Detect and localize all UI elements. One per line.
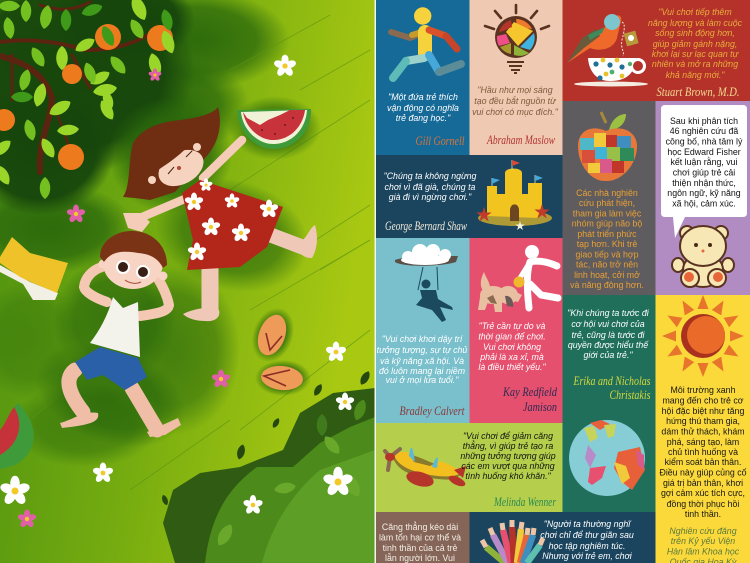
bushes	[161, 369, 375, 563]
quote text	[377, 334, 467, 385]
illustration: children lying on the grass	[0, 0, 425, 563]
girl face	[152, 143, 210, 193]
quote text: giúp giảm gánh nặng,	[653, 39, 737, 49]
body text: phá, sáng tạo, làm	[667, 437, 739, 447]
panel: purple, teddy bear	[656, 101, 750, 295]
source note: Hàn lâm Khoa học	[667, 546, 740, 556]
body text	[570, 188, 644, 290]
quote text: vui ở mọi lứa tuổi."	[386, 375, 459, 385]
panel: blue, runner quote	[376, 0, 470, 155]
source note	[667, 526, 740, 563]
panel: navy, pencils quote	[470, 512, 656, 563]
diagonal grass lines	[30, 15, 370, 490]
author: George Bernard Shaw	[385, 219, 467, 233]
body text: Môi trường xanh	[671, 385, 736, 395]
quote text	[472, 85, 559, 117]
flip-flops	[253, 311, 304, 392]
quote text: khả năng mới."	[666, 70, 725, 80]
source note: trên Kỷ yếu Viện	[671, 536, 735, 546]
quote text: tưởng tượng, sự tự chủ	[377, 345, 467, 355]
panel: lime, airplane quote	[376, 423, 562, 512]
boy head	[103, 237, 163, 289]
dress flowers	[184, 178, 279, 261]
girl hair	[123, 107, 220, 200]
source note: Nghiên cứu đăng	[669, 526, 737, 536]
author: Kay Redfield	[502, 385, 558, 399]
author: Abraham Maslow	[486, 133, 555, 147]
quote text: "Trẻ cần tự do và	[479, 321, 545, 331]
body text: Các nhà nghiên	[576, 188, 638, 198]
icon: child with ball and dog	[478, 245, 558, 312]
author	[573, 374, 651, 402]
quote text: tạo đều bắt nguồn từ	[474, 96, 557, 106]
body text: chơi giúp trẻ cải	[673, 168, 735, 178]
icon: running figure	[391, 7, 461, 78]
body text: gợi cảm xúc tích cực,	[661, 488, 745, 498]
quote text: chơi chỉ để thư giãn sau	[540, 530, 634, 540]
quote text: phải là xa xỉ, mà	[479, 352, 544, 362]
quote text	[387, 92, 459, 123]
body text: Điều này giúp củng cố	[659, 468, 747, 478]
quote text: quyền được hiểu thế	[568, 340, 649, 350]
author	[502, 385, 558, 414]
tree shadow on grass	[0, 0, 425, 563]
quote text: khơi lại sự lạc quan tự	[652, 49, 740, 59]
panel: green, globe quote	[562, 295, 656, 512]
girl arms	[203, 140, 242, 178]
author: Christakis	[610, 388, 651, 402]
quote text: "Hầu như mọi sáng	[477, 85, 553, 95]
body text: kiểm soát bản thân.	[665, 457, 741, 467]
body text: lẫn người lớn. Vui	[385, 553, 455, 563]
body text: Căng thẳng kéo dài	[382, 521, 458, 532]
body text: hội đặc biệt như tăng	[662, 406, 744, 416]
icon: puzzle apple	[578, 112, 637, 181]
panel: peach, lightbulb quote	[470, 0, 562, 155]
quote text: học tập nghiêm túc.	[549, 541, 625, 551]
body text: tinh thần.	[685, 509, 721, 519]
boy	[60, 231, 181, 437]
body text: làm tổn hại cơ thể và	[379, 532, 461, 542]
quote text: "Vui chơi tiếp thêm	[658, 7, 732, 17]
quote text	[567, 308, 650, 360]
body text: nhóm giúp não bộ	[572, 218, 642, 228]
quote text	[648, 7, 743, 80]
girl	[123, 107, 317, 321]
quote text: sống sinh động hơn,	[655, 28, 735, 38]
body text: xã hội, cảm xúc.	[672, 198, 736, 208]
body text: linh hoạt, cởi mở	[574, 270, 640, 280]
icon: coloured pencils	[482, 520, 543, 563]
quote text: "Người ta thường nghĩ	[544, 519, 632, 529]
quote text: chơi vì đã già, chúng ta	[385, 182, 476, 192]
boy arms	[84, 267, 107, 302]
body text: tạp hơn. Khi trẻ	[577, 239, 637, 249]
author: Jamison	[523, 400, 557, 414]
panel: yellow, sun and green environment text	[656, 295, 750, 563]
body text: kết luận rằng, vui	[670, 157, 738, 167]
tree branches	[0, 2, 160, 172]
quote text: thời gian để chơi.	[478, 332, 546, 342]
body text: tinh thần của cả trẻ	[383, 543, 458, 553]
body text	[379, 521, 461, 563]
author: Gill Gornell	[416, 134, 465, 148]
panel: light teal, swing quote	[376, 238, 470, 423]
panel: brown, stress text	[376, 512, 470, 563]
icon: bird on teacup	[567, 14, 648, 86]
book	[0, 237, 68, 300]
tree canopy dark backdrop	[0, 0, 195, 215]
quote text: các em vượt qua những	[461, 461, 555, 471]
icon: globe	[569, 420, 645, 496]
quote text: trẻ đang học."	[396, 113, 451, 123]
oranges	[0, 24, 173, 170]
body text: hứng thú tham gia,	[666, 416, 740, 426]
body text: 46 nghiên cứu đã	[670, 126, 738, 136]
quote text: giới của trẻ."	[583, 350, 633, 360]
author: Melinda Wenner	[493, 495, 556, 509]
boy shorts	[75, 347, 147, 390]
speech bubble	[661, 105, 747, 238]
body text: phát triển phức	[577, 229, 637, 239]
quote text: tình huống khó khăn."	[465, 471, 552, 481]
body text: mang đến cho trẻ cơ	[662, 396, 744, 406]
author: Erika and Nicholas	[573, 374, 651, 388]
girl dress	[182, 180, 283, 270]
body text: tham gia làm việc	[573, 208, 642, 218]
body text: tác, não trở nên	[576, 260, 638, 270]
body text: ngôn ngữ, kỹ năng	[667, 188, 741, 198]
quote text	[384, 171, 477, 202]
icon: sun	[662, 295, 744, 377]
quote text: nhiên và mở ra những	[652, 59, 738, 69]
body text: công bố, nhà tâm lý	[666, 136, 743, 146]
panel: navy, castle quote	[376, 155, 562, 238]
grass flowers	[0, 55, 355, 528]
body text: Sau khi phân tích	[670, 116, 738, 126]
quote text: Nhưng với trẻ em, chơi	[542, 551, 633, 561]
quote text: "Chúng ta không ngừng	[384, 171, 477, 181]
quote text	[460, 431, 556, 481]
girl legs	[202, 268, 218, 312]
quote text: cơ hội vui chơi của	[571, 319, 645, 329]
boy legs	[69, 370, 83, 412]
quote text: và kỹ năng xã hội. Và	[380, 356, 464, 366]
body text: chủ tình huống và	[668, 447, 738, 457]
icon: teddy bear	[672, 226, 734, 287]
quote text: năng lượng và làm cuộc	[648, 18, 743, 28]
quote text: thẳng, vì giúp trẻ tạo ra	[463, 440, 553, 451]
quote text	[478, 321, 546, 372]
grass halos around the figures	[20, 96, 322, 467]
body text: học Edward Fisher	[667, 147, 741, 157]
panel: grey, apple puzzle	[562, 101, 656, 295]
body text: đồng thời phục hồi	[667, 499, 739, 509]
icon: sand castle	[476, 160, 552, 230]
quote text: "Vui chơi khơi dậy trí	[382, 334, 464, 344]
body text: dám thử thách, khám	[661, 426, 745, 436]
quote text: "Vui chơi để giảm căng	[463, 431, 553, 441]
body text: và năng động hơn.	[570, 280, 644, 290]
quote text: vui chơi có mục đích."	[472, 107, 559, 117]
boy tank top	[90, 297, 140, 357]
icon: lightbulb	[485, 5, 549, 73]
body text	[666, 116, 743, 208]
panel: pink, dog and person quote	[470, 238, 562, 423]
tree leaves	[0, 0, 178, 199]
body text: giao tiếp và hợp	[576, 250, 639, 260]
watermelon rind lower-left	[0, 403, 34, 469]
body text: cứu phát hiện,	[579, 198, 635, 208]
quote text	[540, 519, 634, 561]
quote text: những tưởng tượng giúp	[460, 451, 556, 461]
quote text: Vui chơi không	[483, 342, 541, 352]
icon: cloud with swing	[395, 244, 458, 322]
quote text: vận động có nghĩa	[387, 103, 459, 113]
body text: thiện nhận thức,	[672, 178, 736, 188]
quote text: đó luôn mang lại niềm	[379, 366, 465, 376]
icon: toy airplane	[385, 448, 467, 489]
quote text: "Khi chúng ta tước đi	[567, 308, 650, 318]
watermelon held by girl	[237, 109, 311, 149]
body text: giá trị bản thân, khơi	[663, 478, 743, 488]
body text	[659, 385, 747, 519]
author: Bradley Calvert	[400, 404, 465, 418]
panel: red, bird and teacup quote	[562, 0, 750, 101]
quote text: trẻ, cũng là tước đi	[572, 330, 646, 340]
quote text: già đi vì ngừng chơi."	[389, 192, 472, 202]
quote text: là điều thiết yếu."	[478, 362, 546, 372]
edge line	[374, 0, 376, 563]
quote text: "Một đứa trẻ thích	[388, 92, 458, 102]
